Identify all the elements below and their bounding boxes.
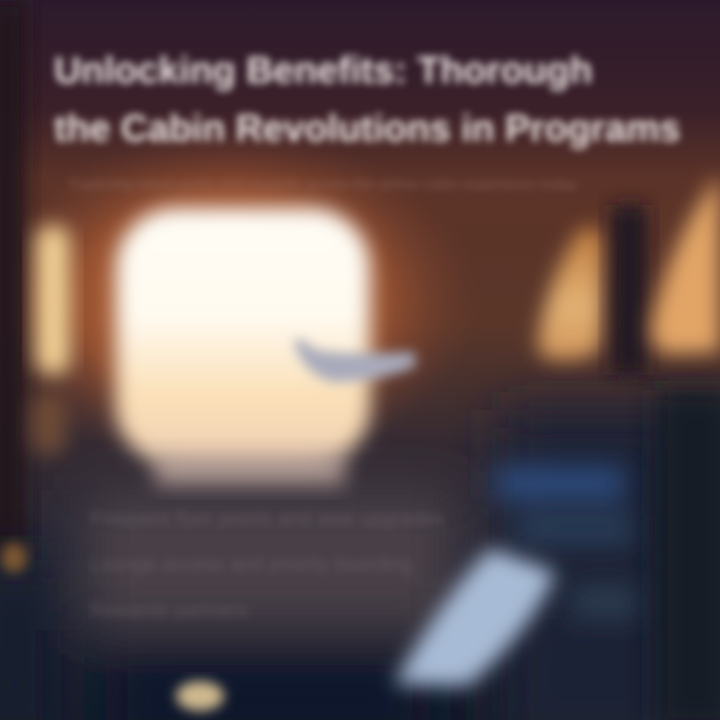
horizon glow under window — [155, 452, 345, 486]
seat rows lower area — [0, 410, 720, 720]
window glow — [0, 130, 480, 470]
body text block — [90, 508, 444, 622]
right window two — [651, 175, 720, 354]
airplane silhouette in window — [294, 339, 416, 382]
lower left window reflection — [30, 395, 66, 455]
title: the Cabin Revolutions in Programs — [54, 107, 680, 149]
body text block: Rewards partners — [90, 600, 248, 622]
left window — [36, 225, 70, 375]
body text block: Frequent flyer points and seat upgrades — [90, 508, 444, 530]
dark seat back — [655, 390, 720, 720]
title: Unlocking Benefits: Thorough — [54, 49, 593, 91]
left pillar — [0, 0, 26, 560]
title — [50, 49, 684, 155]
right window one — [538, 227, 604, 360]
right dark pillar — [612, 205, 646, 375]
small warm reading light — [176, 681, 224, 711]
subtitle: Exploring travel perks and rewards across the airline cabin experience today — [70, 176, 577, 193]
main window — [116, 208, 370, 466]
white tablet — [394, 548, 556, 686]
body text block: Lounge access and priority boarding — [90, 554, 412, 576]
blue seat panels — [495, 468, 640, 619]
left warm spot — [1, 543, 27, 573]
